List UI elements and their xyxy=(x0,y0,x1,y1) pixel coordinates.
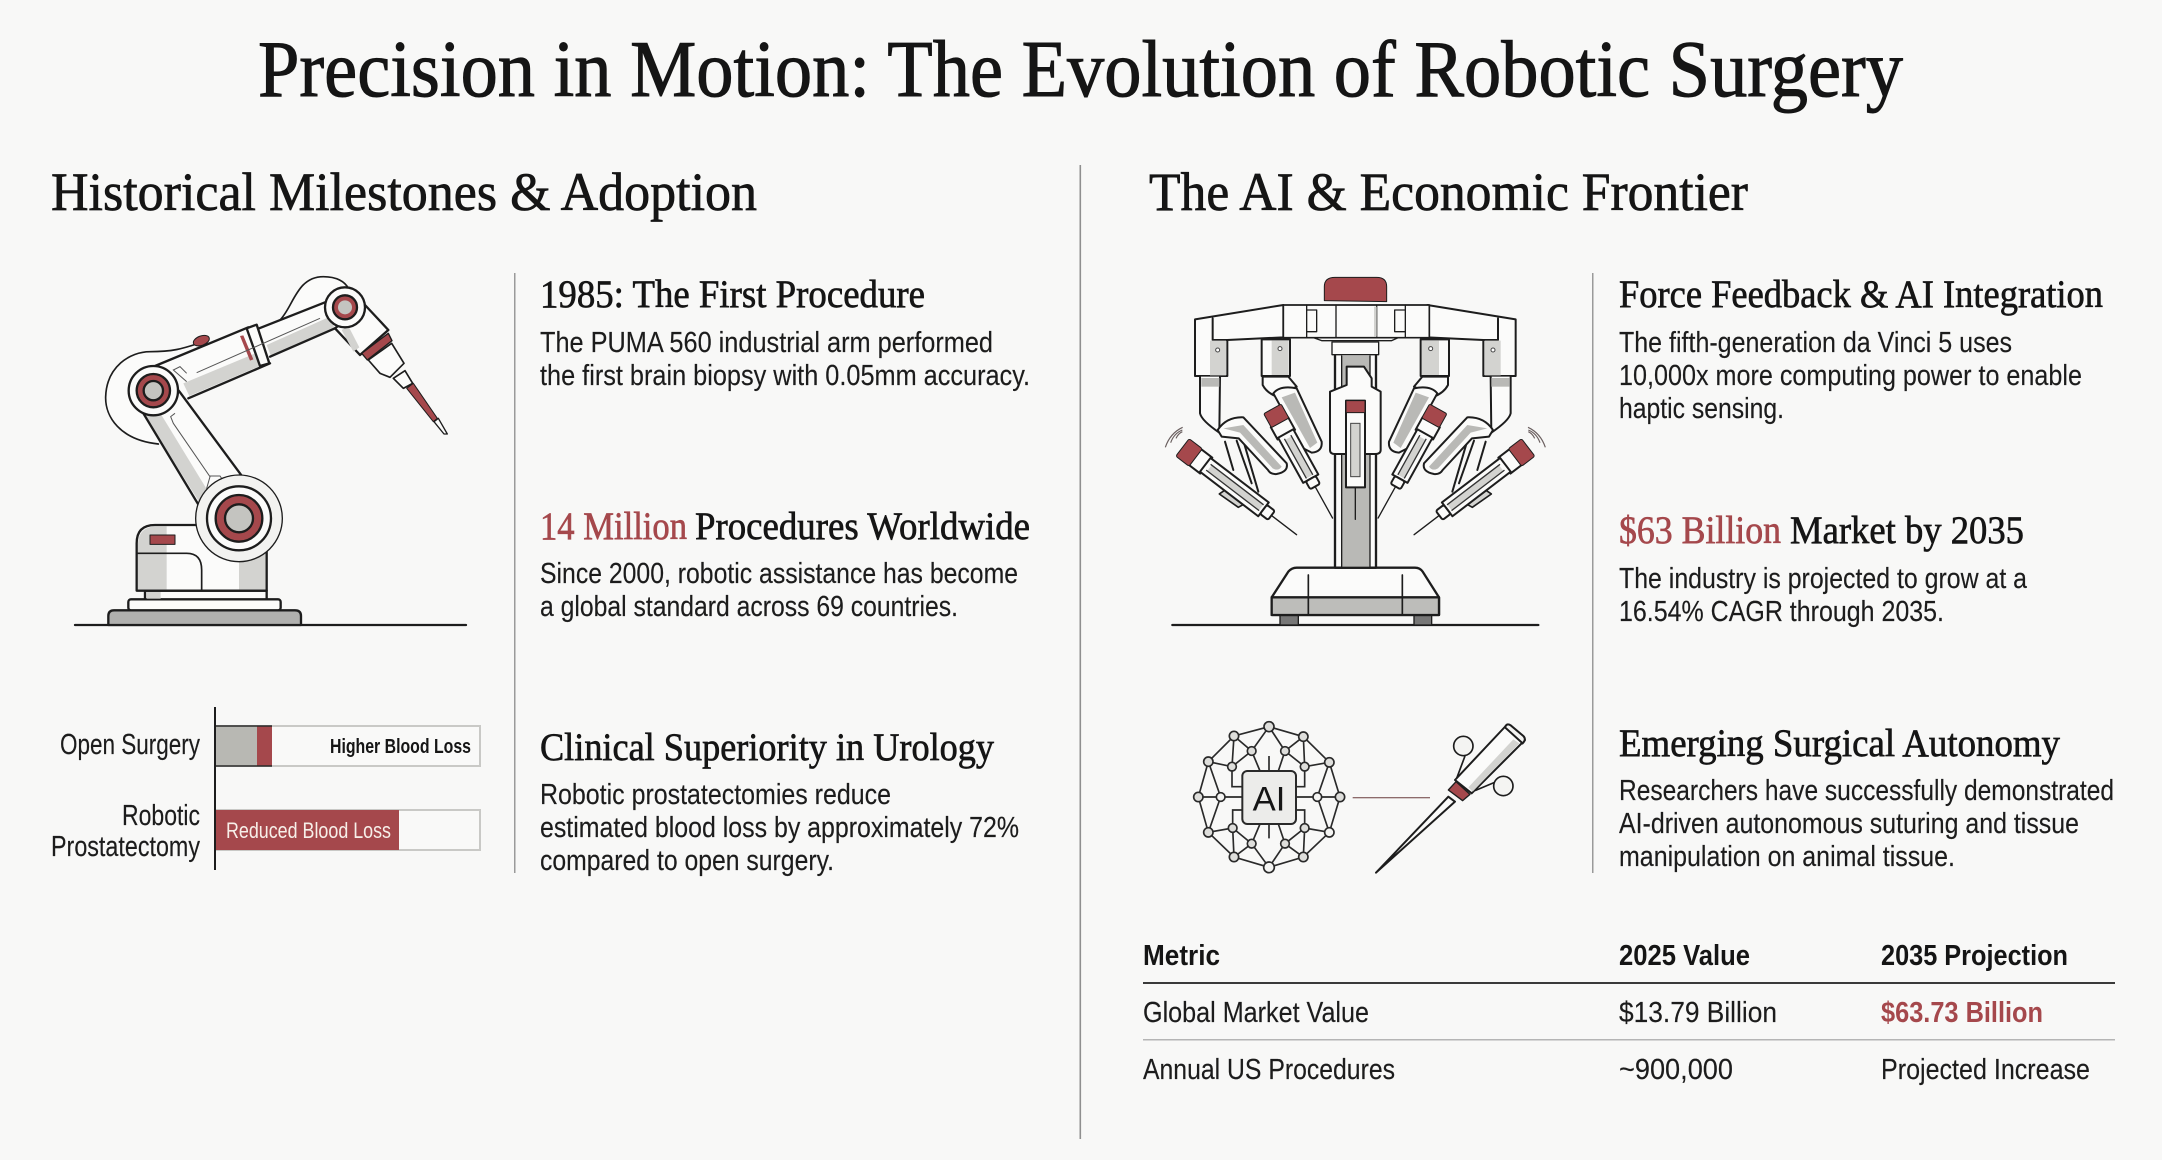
text block: 14 million procedures: 14 Million xyxy=(540,505,687,548)
text block: 14 million procedures xyxy=(540,505,1030,623)
table: market metrics: Metric xyxy=(1143,940,1220,972)
text block: force feedback xyxy=(1619,273,2103,425)
bar: open surgery xyxy=(215,726,480,766)
bar: robotic prostatectomy xyxy=(215,810,480,850)
chart labels: Prostatectomy xyxy=(51,831,200,863)
text block: clinical superiority xyxy=(540,726,1019,877)
panel: AI and economic frontier xyxy=(1143,162,2115,1086)
text block: 1985 first procedure: The PUMA 560 industrial arm performed xyxy=(540,327,993,359)
table: market metrics: 2025 Value xyxy=(1619,940,1750,972)
scalpel tool xyxy=(1376,724,1525,873)
AI network xyxy=(1194,722,1345,873)
icon: multi-arm surgical robot xyxy=(1165,277,1545,625)
heading: AI and economic frontier: The AI & Economic Frontier xyxy=(1149,162,1748,222)
text block: 14 million procedures: Procedures Worldwide xyxy=(695,505,1030,548)
panel: historical milestones and adoption xyxy=(51,162,1030,877)
text block: 63 billion market: Market by 2035 xyxy=(1790,509,2024,552)
AI network: AI xyxy=(1253,781,1285,819)
table: market metrics: $63.73 Billion xyxy=(1881,997,2043,1029)
table: market metrics: ~900,000 xyxy=(1619,1054,1733,1086)
text block: clinical superiority: Robotic prostatectomies reduce xyxy=(540,779,891,811)
text block: 63 billion market: 16.54% CAGR through 2035. xyxy=(1619,596,1944,628)
text block: 1985 first procedure: 1985: The First Procedure xyxy=(540,273,925,316)
text block: 63 billion market xyxy=(1619,509,2028,628)
text block: surgical autonomy: manipulation on animal tissue. xyxy=(1619,841,1955,873)
table: market metrics: $13.79 Billion xyxy=(1619,997,1777,1029)
text block: surgical autonomy xyxy=(1619,722,2114,873)
icon: AI network connected to scalpel xyxy=(1194,722,1525,873)
text block: 63 billion market: $63 Billion xyxy=(1619,509,1781,552)
text block: clinical superiority: Clinical Superiority in Urology xyxy=(540,726,994,769)
text block: force feedback: Force Feedback & AI Integration xyxy=(1619,273,2103,316)
bar chart: blood loss comparison xyxy=(51,707,480,870)
bar: open surgery: Higher Blood Loss xyxy=(330,736,471,758)
text block: surgical autonomy: AI-driven autonomous suturing and tissue xyxy=(1619,808,2079,840)
chart labels: Open Surgery xyxy=(60,729,200,761)
icon: single-arm surgical robot xyxy=(75,277,466,625)
text block: force feedback: 10,000x more computing power to enable xyxy=(1619,360,2082,392)
table: market metrics: 2035 Projection xyxy=(1881,940,2068,972)
table: market metrics: Global Market Value xyxy=(1143,997,1369,1029)
table: market metrics: Projected Increase xyxy=(1881,1054,2090,1086)
text block: clinical superiority: estimated blood loss by approximately 72% xyxy=(540,812,1019,844)
text block: 14 million procedures: a global standard across 69 countries. xyxy=(540,591,958,623)
text block: 1985 first procedure xyxy=(540,273,1030,392)
table: market metrics xyxy=(1143,940,2115,1086)
text block: force feedback: haptic sensing. xyxy=(1619,393,1784,425)
table: market metrics: Annual US Procedures xyxy=(1143,1054,1395,1086)
bar: robotic prostatectomy: Reduced Blood Loss xyxy=(226,818,391,843)
text block: surgical autonomy: Emerging Surgical Autonomy xyxy=(1619,722,2060,765)
heading: historical milestones: Historical Milestones & Adoption xyxy=(51,162,757,222)
text block: 1985 first procedure: the first brain biopsy with 0.05mm accuracy. xyxy=(540,360,1030,392)
text block: force feedback: The fifth-generation da Vinci 5 uses xyxy=(1619,327,2012,359)
title: Precision in Motion: The Evolution of Robotic Surgery xyxy=(258,24,1903,114)
text block: 63 billion market: The industry is projected to grow at a xyxy=(1619,563,2028,595)
chart labels: Robotic xyxy=(122,800,200,832)
chart labels xyxy=(51,729,200,863)
text block: clinical superiority: compared to open surgery. xyxy=(540,845,834,877)
text block: 14 million procedures: Since 2000, robotic assistance has become xyxy=(540,558,1018,590)
